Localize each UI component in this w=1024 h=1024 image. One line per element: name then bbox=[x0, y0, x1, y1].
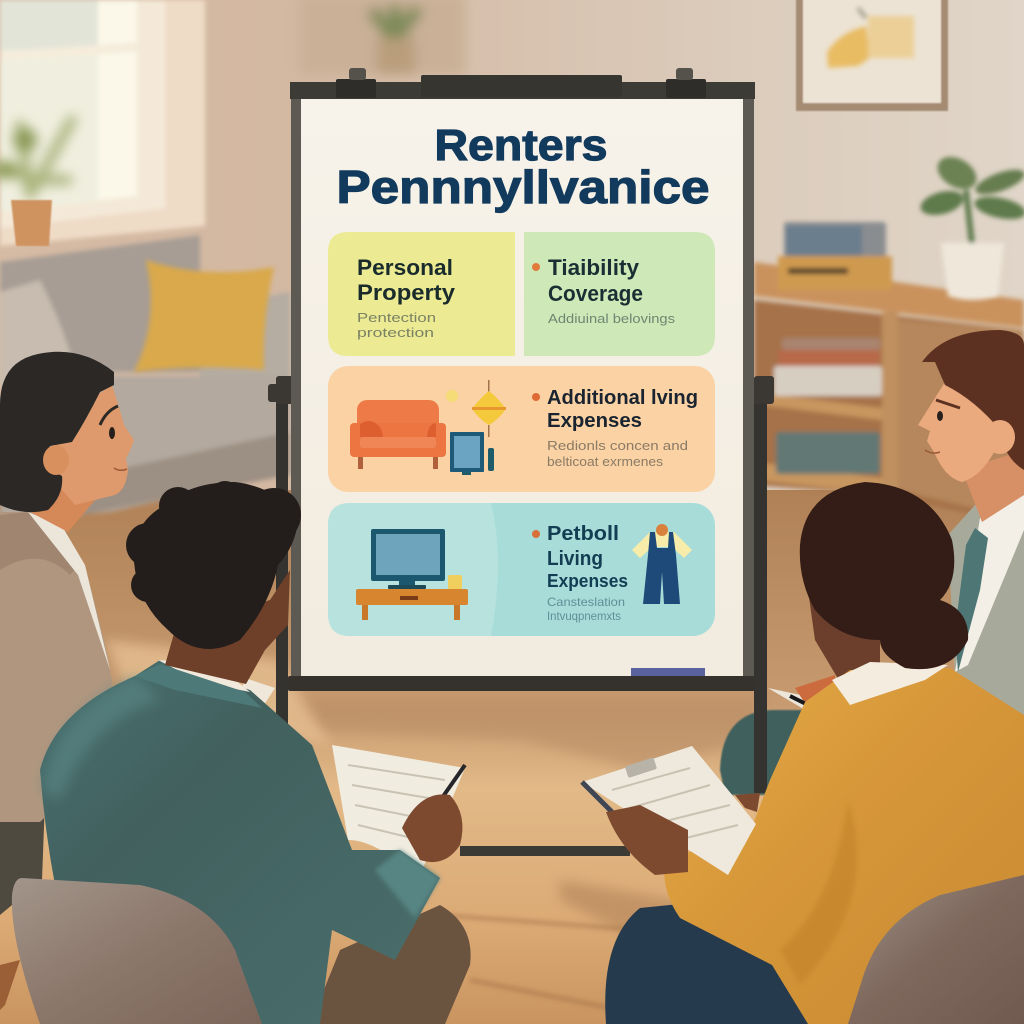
hair bbox=[922, 330, 1024, 470]
description: Pentection bbox=[357, 310, 436, 325]
wall plant on shelf behind the board bbox=[300, 0, 465, 75]
heading bbox=[548, 255, 643, 306]
ear bbox=[985, 420, 1015, 454]
smile bbox=[114, 468, 127, 470]
heading bbox=[547, 523, 628, 591]
board surface bbox=[301, 99, 743, 678]
description bbox=[547, 438, 688, 469]
description bbox=[547, 595, 625, 623]
white shirt bbox=[28, 512, 110, 670]
heading: Tiaibility bbox=[548, 255, 640, 280]
radio on shelf bbox=[778, 222, 892, 290]
face bbox=[45, 385, 134, 505]
yellow cushion bbox=[134, 260, 274, 372]
pen bbox=[790, 696, 818, 710]
description: Addiuinal belovings bbox=[548, 311, 676, 326]
smile bbox=[925, 450, 940, 453]
description: Cansteslation bbox=[547, 595, 625, 609]
curly hair bbox=[126, 481, 301, 649]
collar bbox=[158, 660, 250, 692]
window bbox=[0, 0, 205, 246]
trousers bbox=[310, 905, 471, 1024]
potted plant on shelf bbox=[918, 150, 1024, 300]
person: woman in mustard sweater bbox=[582, 482, 1024, 1024]
teal chair cushion behind easel bbox=[720, 710, 830, 795]
eye bbox=[937, 411, 943, 421]
sleeve shadow bbox=[780, 800, 857, 985]
icon: orange sofa bbox=[350, 400, 446, 469]
flipchart easel bbox=[268, 68, 774, 856]
face bbox=[918, 375, 1000, 482]
description bbox=[357, 310, 436, 340]
neck bbox=[30, 480, 95, 532]
panel: additional living expenses bbox=[328, 366, 715, 492]
neck and head skin bbox=[165, 570, 290, 684]
eyebrow bbox=[100, 406, 118, 425]
heading: Coverage bbox=[548, 281, 643, 306]
neck bbox=[962, 450, 1024, 522]
trousers bbox=[0, 800, 45, 915]
hand holding clipboard bbox=[606, 805, 688, 875]
hand bbox=[402, 794, 462, 862]
beige blazer bbox=[0, 512, 112, 822]
bullet bbox=[532, 263, 540, 271]
icon: tablet device bbox=[450, 432, 494, 475]
cuff highlight bbox=[375, 850, 440, 918]
icon: television on table bbox=[356, 529, 468, 620]
second hand bbox=[735, 793, 760, 812]
description: belticoat exrmenes bbox=[547, 454, 664, 469]
icon: overalls bbox=[632, 524, 692, 604]
heading bbox=[547, 387, 698, 432]
sweater collar fold bbox=[135, 664, 262, 708]
navy trousers bbox=[605, 900, 810, 1024]
heading: Expenses bbox=[547, 570, 628, 591]
tie bbox=[955, 528, 988, 672]
icon: pendant lamp bbox=[446, 380, 506, 437]
chair: right foreground bbox=[848, 875, 1024, 1024]
clipboard bbox=[582, 746, 756, 875]
teal sweater bbox=[40, 660, 440, 1024]
panel: personal property bbox=[328, 232, 515, 356]
notepad bbox=[332, 745, 465, 880]
bullet bbox=[532, 393, 540, 401]
title bbox=[336, 121, 710, 213]
skin under bun bbox=[808, 590, 880, 682]
framed picture bbox=[796, 0, 948, 111]
clipboard behind hand bbox=[768, 688, 825, 714]
person: seated man in teal sweater bbox=[40, 481, 471, 1024]
eye bbox=[109, 427, 115, 439]
head and hair bbox=[800, 482, 968, 669]
person: man on right bbox=[918, 330, 1024, 735]
easel legs bbox=[268, 376, 774, 856]
wooden shelf bbox=[754, 262, 1024, 525]
whiteboard frame bbox=[290, 68, 755, 685]
heading bbox=[357, 255, 456, 305]
grey-green blazer bbox=[948, 490, 1024, 735]
heading: Additional lving bbox=[547, 387, 698, 409]
lapel bbox=[0, 512, 78, 575]
sweater bbox=[664, 668, 1024, 1024]
collar bbox=[832, 662, 948, 705]
potted plant on window sill bbox=[0, 120, 72, 246]
sofa bbox=[0, 235, 290, 520]
eyebrow bbox=[936, 400, 960, 408]
title: Renters bbox=[434, 121, 608, 170]
heading: Living bbox=[547, 548, 603, 570]
paper behind shoulder bbox=[240, 678, 275, 708]
hand with pen bbox=[795, 675, 835, 708]
description: Redionls concen and bbox=[547, 438, 688, 453]
heading: Expenses bbox=[547, 410, 642, 432]
panel: liability coverage bbox=[524, 232, 715, 356]
title: Pennnyllvanice bbox=[336, 161, 710, 213]
panel: petboll living expenses bbox=[328, 503, 715, 636]
description: Intvuqpnemxts bbox=[547, 609, 621, 623]
heading: Personal bbox=[357, 255, 453, 280]
shoulder highlight bbox=[42, 676, 160, 800]
marker tray bbox=[288, 668, 755, 691]
heading: Petboll bbox=[547, 523, 619, 545]
chair: left foreground bbox=[0, 878, 262, 1024]
bullet bbox=[532, 530, 540, 538]
shirt bbox=[955, 495, 1024, 672]
description: protection bbox=[357, 325, 434, 340]
person: woman on left bbox=[0, 352, 134, 915]
ear bbox=[43, 445, 69, 475]
hair bbox=[0, 352, 114, 512]
heading: Property bbox=[357, 280, 456, 305]
